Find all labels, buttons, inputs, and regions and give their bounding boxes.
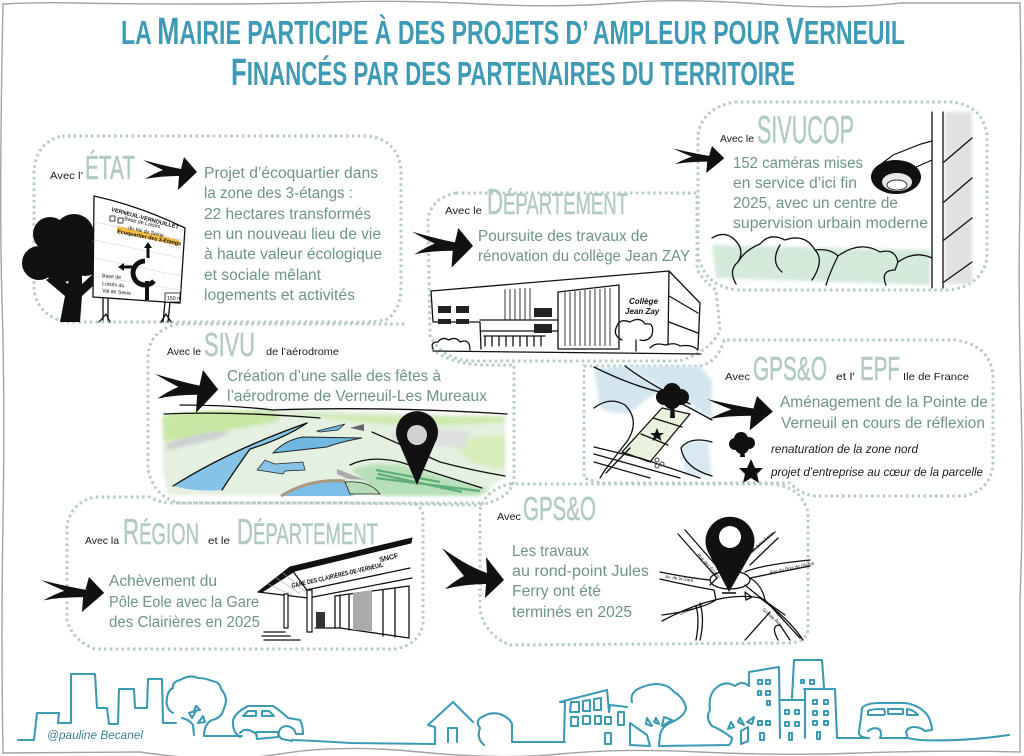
text: caméras — [733, 155, 928, 232]
heading: Région et Département: RÉGION — [123, 511, 199, 552]
heading: GPS&O et EPF: Ile de France — [903, 371, 969, 383]
road sign: 150 m — [167, 296, 181, 302]
text: Pôle Eole: Achèvement du — [109, 573, 217, 590]
icon: surveillance camera — [871, 141, 932, 194]
map: rond-point Jules Ferry: Grande Rue — [761, 607, 783, 627]
road sign: Loisirs du — [102, 281, 125, 289]
arrow: SIVU — [155, 370, 218, 413]
text: Pointe de Verneuil — [780, 394, 988, 432]
heading: État: ÉTAT — [85, 149, 135, 186]
skyline: left — [18, 674, 473, 744]
heading: Département — [445, 181, 628, 222]
text: Pointe de Verneuil: Verneuil en cours de réflexion — [781, 415, 985, 432]
illustration: collège Jean Zay: Collège — [629, 297, 658, 306]
illustration: gare des Clairières — [258, 538, 412, 640]
road sign: VERNEUIL-VERNOUILLET — [110, 207, 180, 231]
heading: SIVUCOP: SIVUCOP — [757, 109, 854, 152]
heading: Région et Département: Avec la — [85, 535, 119, 547]
map: rond-point Jules Ferry: Rue des Écoles — [696, 552, 722, 580]
ground and tree — [659, 683, 754, 746]
heading: Région et Département — [85, 511, 378, 552]
panel: SIVU — [148, 324, 514, 505]
road sign — [93, 196, 185, 322]
text: collège: Poursuite des travaux de — [478, 228, 648, 245]
text: écoquartier: 22 hectares transformés — [204, 206, 371, 223]
text: caméras: en service d’ici fin — [733, 175, 857, 192]
apartment towers — [749, 660, 869, 740]
road sign: Base de Loisirs — [124, 216, 161, 230]
illustration: collège Jean Zay — [431, 271, 701, 354]
title — [121, 11, 905, 94]
illustration: gare des Clairières: SNCF — [379, 553, 400, 564]
text: rond-point: Ferry ont été — [512, 583, 601, 600]
heading: SIVU: de l’aérodrome — [266, 346, 339, 358]
text: Pointe de Verneuil: Aménagement de la Pointe de — [780, 394, 988, 411]
icon: location pin — [706, 517, 754, 592]
map: rond-point Jules Ferry: Av. de la Gare — [665, 574, 694, 583]
ground and house — [292, 702, 473, 744]
car — [233, 706, 303, 741]
heading: GPS&O et EPF: Avec — [725, 371, 750, 383]
heading: Département: DÉPARTEMENT — [487, 181, 628, 222]
road sign: Val de Seine — [102, 288, 131, 297]
tree — [167, 676, 242, 736]
tree — [630, 684, 686, 746]
map: Pointe de Verneuil — [594, 366, 713, 478]
text: écoquartier: logements et activités — [204, 287, 355, 304]
road sign: Base de — [102, 273, 121, 281]
legend: star — [739, 459, 983, 483]
text: écoquartier: la zone des 3-étangs : — [204, 185, 353, 202]
panel: Département — [412, 181, 720, 361]
text: rond-point: Les travaux — [512, 543, 589, 560]
text: caméras: supervision urbain moderne — [733, 215, 928, 232]
road sign: du Val de Seine — [128, 225, 164, 239]
text: caméras: 152 caméras mises — [733, 155, 863, 172]
heading: GPS&O: GPS&O — [523, 490, 596, 527]
text: collège — [478, 228, 690, 265]
map: rond-point Jules Ferry: Grande Rue — [679, 602, 704, 616]
icon: location pin — [396, 411, 438, 485]
aerial illustration: aerodrome — [162, 405, 507, 496]
panel: GPS&O et EPF — [584, 340, 993, 496]
legend: tree: renaturation de la zone nord — [771, 444, 919, 456]
arrow: SIVUCOP — [673, 146, 724, 173]
heading: SIVU: Avec le — [167, 346, 201, 358]
text: écoquartier: et sociale mêlant — [204, 267, 322, 284]
school building — [560, 690, 627, 744]
map: rond-point Jules Ferry: Rue du Bois de l’Aulne — [769, 561, 815, 575]
legend: tree — [729, 432, 919, 457]
text: écoquartier: à haute valeur écologique — [204, 246, 382, 263]
map: rond-point Jules Ferry — [660, 530, 815, 640]
skyline: right — [478, 660, 1009, 746]
heading: État: Avec l’ — [50, 170, 83, 182]
arrow: Région — [41, 577, 104, 612]
text: caméras: 2025, avec un centre de — [733, 195, 898, 212]
arrow: GPS&O — [442, 548, 504, 598]
text: salle des fêtes: l’aérodrome de Verneuil-Les Mureaux — [227, 388, 487, 405]
text: Pôle Eole: Pôle Eole avec la Gare — [109, 594, 259, 611]
heading: SIVU — [167, 326, 339, 363]
arrow: EPF — [707, 396, 773, 430]
van — [859, 703, 1009, 740]
title: LA MAIRIE PARTICIPE À DES PROJETS D’ AMPLEUR POUR VERNEUIL — [121, 11, 905, 53]
arrow: Département — [412, 228, 473, 268]
text: salle des fêtes: Création d’une salle des fêtes à — [227, 368, 441, 385]
text: écoquartier: en un nouveau lieu de vie — [204, 226, 381, 243]
icon: black tree — [22, 214, 103, 322]
heading: GPS&O: Avec — [497, 511, 521, 523]
arrow: État — [143, 157, 197, 190]
panel: Région et Département — [41, 497, 480, 649]
text: rond-point — [512, 543, 649, 621]
heading: SIVU: SIVU — [204, 326, 255, 363]
legend: star: projet d’entreprise au cœur de la parcelle — [770, 467, 983, 479]
heading: État — [50, 149, 135, 186]
heading: GPS&O et EPF: et l’ — [836, 371, 855, 383]
text: salle des fêtes — [227, 368, 487, 405]
text: écoquartier: Projet d’écoquartier dans — [204, 165, 378, 182]
text: rond-point: au rond-point Jules — [512, 563, 649, 580]
text: Pôle Eole — [109, 573, 260, 631]
heading: GPS&O et EPF: EPF — [860, 350, 900, 387]
heading: GPS&O et EPF — [725, 350, 969, 387]
road sign: Ecoquartier des 3-Étangs — [117, 227, 182, 247]
illustration: collège Jean Zay: Jean Zay — [625, 307, 660, 316]
text: rond-point: terminés en 2025 — [512, 604, 632, 621]
heading: SIVUCOP — [720, 109, 854, 152]
heading: GPS&O — [497, 490, 596, 527]
panel: GPS&O rond-point — [442, 484, 815, 645]
panel: État — [22, 136, 401, 322]
heading: Département: Avec le — [445, 205, 482, 217]
heading: SIVUCOP: Avec le — [720, 133, 754, 145]
signature: @pauline Becanel — [47, 728, 143, 742]
illustration: wall and bushes — [712, 112, 972, 288]
heading: GPS&O et EPF: GPS&O — [753, 350, 827, 387]
illustration: gare des Clairières: GARE DES CLAIRIÈRES-DE-VERNEUIL — [290, 560, 384, 590]
heading: Région et Département: DÉPARTEMENT — [237, 511, 378, 552]
text: écoquartier — [204, 165, 382, 304]
panel: SIVUCOP — [673, 102, 987, 290]
heading: Région et Département: et le — [208, 535, 230, 547]
map: rond-point Jules Ferry: Rue Jules Ferry — [747, 530, 775, 556]
text: Pôle Eole: des Clairières en 2025 — [109, 614, 260, 631]
text: collège: rénovation du collège Jean ZAY — [478, 248, 690, 265]
